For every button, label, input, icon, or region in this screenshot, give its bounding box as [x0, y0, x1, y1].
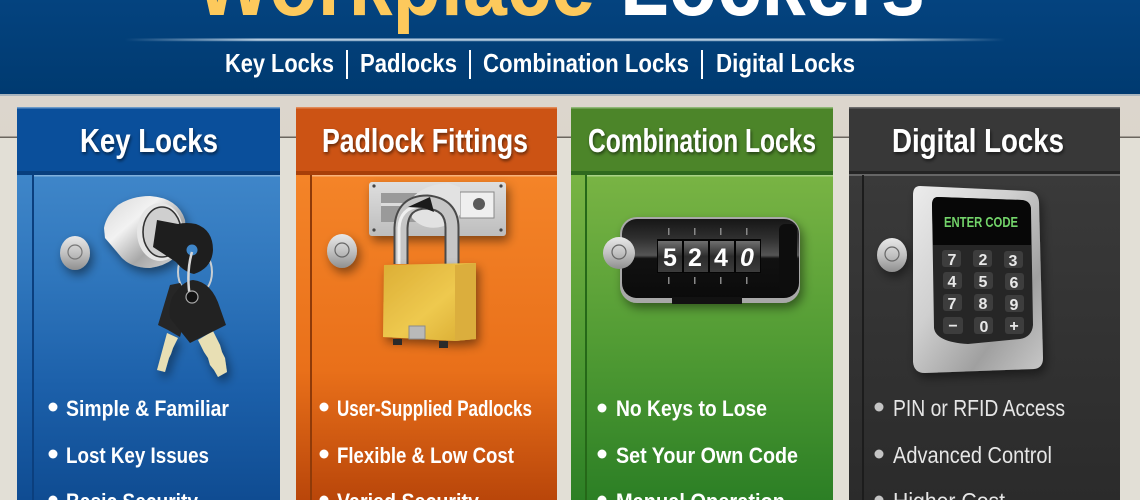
bullet list: Set Your Own Code [616, 443, 798, 468]
keypad digits: 9 [1010, 297, 1019, 314]
icon: digital keypad [913, 186, 1043, 373]
keypad digits: + [1009, 318, 1019, 335]
subtitle: Padlocks [360, 48, 457, 78]
icon: door button [327, 234, 357, 268]
hasp plate [369, 182, 506, 236]
keypad digits: − [948, 318, 958, 335]
keypad digits: 7 [948, 296, 957, 313]
bullet list [874, 395, 1065, 500]
keypad digits: 5 [979, 274, 988, 291]
digit wheels: 4 [714, 244, 728, 272]
keypad digits [948, 252, 1019, 336]
subtitle: Digital Locks [716, 48, 855, 78]
shackle [401, 202, 452, 264]
bullet list: No Keys to Lose [616, 396, 767, 421]
panel: digital locks [849, 107, 1120, 500]
heading: Combination Locks [588, 122, 816, 159]
keypad buttons [942, 250, 1024, 334]
key fob in lock [153, 220, 213, 274]
heading: Key Locks [80, 122, 218, 159]
padlock body [383, 263, 476, 341]
heading: Padlock Fittings [322, 122, 528, 159]
keypad digits: 4 [948, 274, 957, 291]
keypad digits: 3 [1009, 253, 1018, 270]
bullet list: Flexible & Low Cost [337, 443, 515, 468]
bullet list [320, 396, 532, 500]
title [196, 0, 925, 35]
bullet list: Advanced Control [893, 442, 1052, 468]
bullet list [48, 396, 229, 500]
lock cylinder [104, 196, 186, 268]
icon: door button [877, 238, 907, 272]
panel: padlock fittings [296, 107, 557, 500]
panel: combination locks [571, 107, 833, 500]
bullet list: User-Supplied Padlocks [337, 396, 532, 421]
icon: key lock with keys [104, 196, 227, 377]
panel: key locks [17, 107, 280, 500]
digit wheels: 2 [688, 244, 702, 272]
keypad digits: 0 [980, 319, 989, 336]
heading: Digital Locks [892, 122, 1064, 159]
subtitle: Combination Locks [483, 48, 689, 78]
digit wheels: 5 [663, 244, 677, 272]
large key ring [178, 249, 212, 295]
bullet list: PIN or RFID Access [893, 395, 1065, 421]
keypad digits: 8 [979, 296, 988, 313]
icon: padlock on hasp [369, 182, 506, 348]
icon: door button [603, 237, 635, 269]
bullet list: Lost Key Issues [66, 443, 209, 468]
digit wheels [657, 239, 761, 273]
screen text: ENTER CODE [944, 214, 1018, 231]
header banner [0, 0, 1140, 96]
subtitle: Key Locks [225, 48, 334, 78]
icon: door button [60, 236, 90, 270]
subtitle [225, 48, 855, 79]
icon: combination lock [620, 217, 800, 304]
keypad digits: 6 [1010, 275, 1019, 292]
bullet list [598, 396, 798, 500]
key heads [158, 283, 190, 337]
digit wheels: 0 [740, 244, 754, 272]
key blades [157, 331, 227, 377]
keypad digits: 7 [948, 252, 957, 269]
bullet list: Simple & Familiar [66, 396, 229, 421]
keypad digits: 2 [979, 252, 988, 269]
